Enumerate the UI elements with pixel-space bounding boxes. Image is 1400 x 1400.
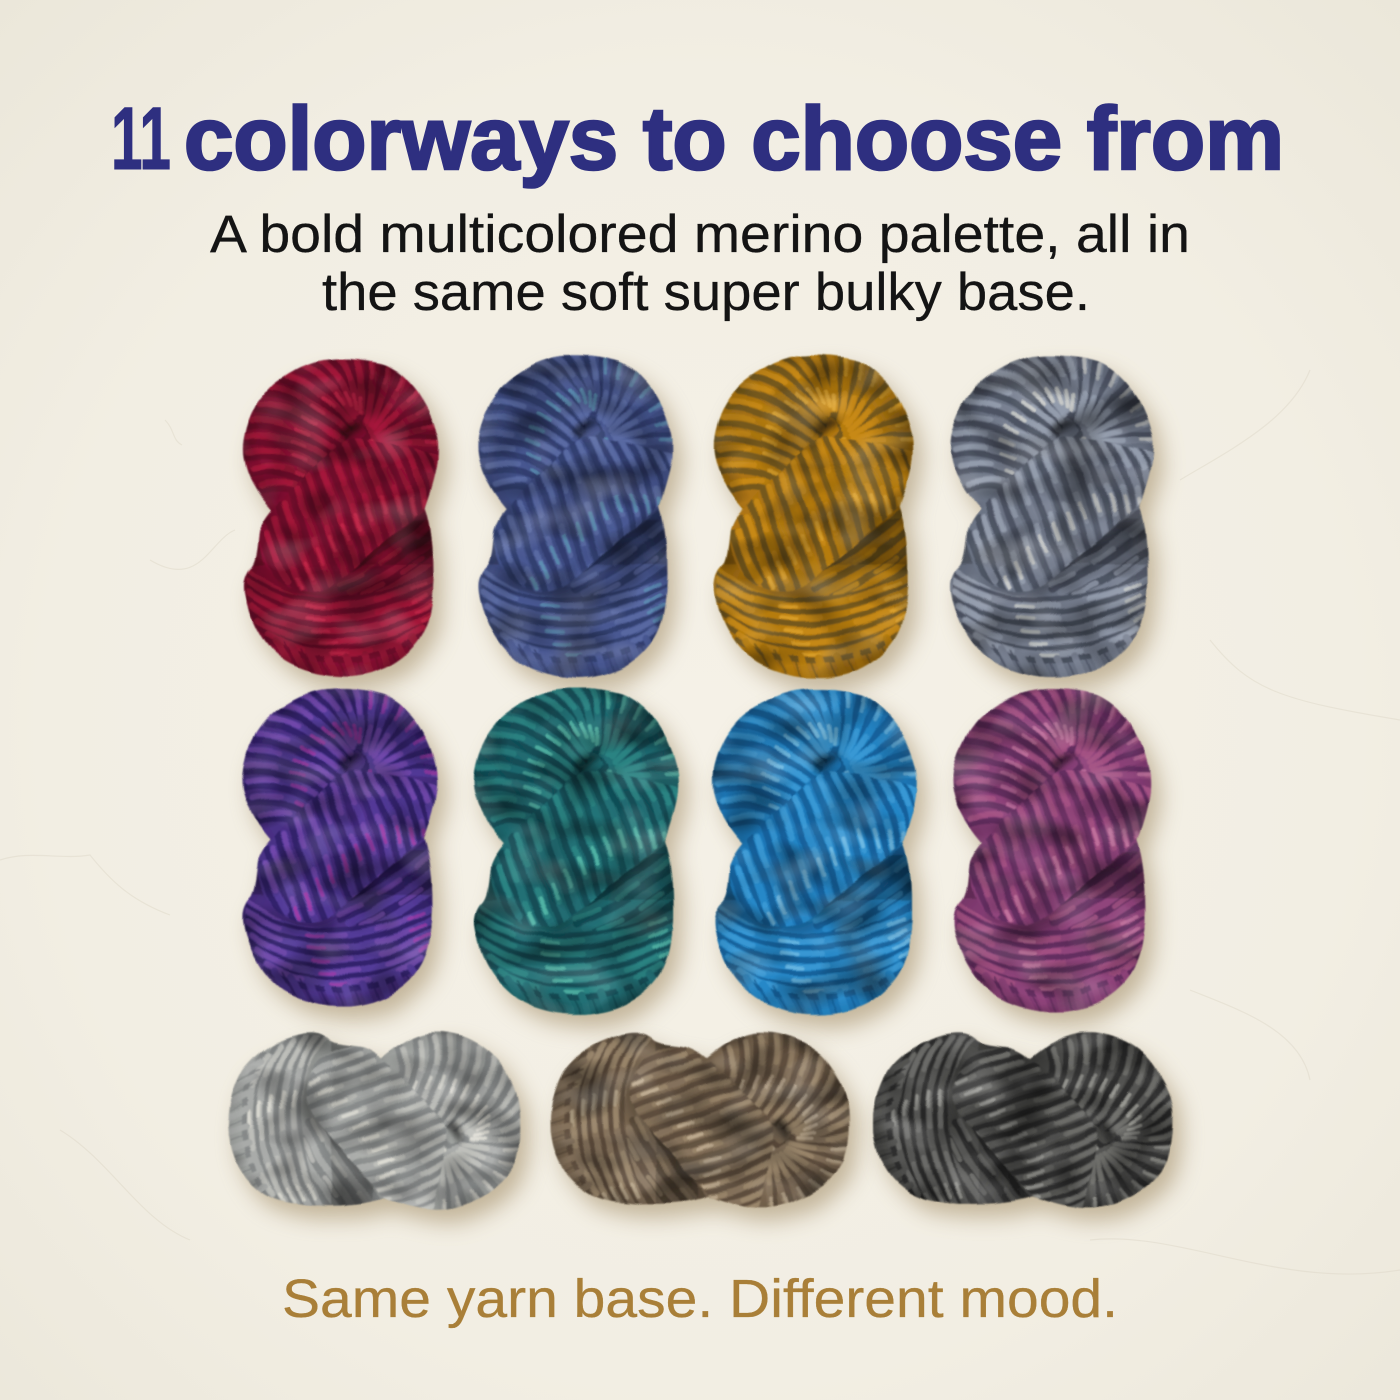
title: colorways to choose from bbox=[184, 88, 1284, 188]
skein: deep teal bbox=[466, 679, 691, 1023]
footer tagline: Same yarn base. Different mood. bbox=[282, 1269, 1118, 1329]
skein: crimson red bbox=[235, 350, 450, 685]
skein: charcoal bbox=[865, 1025, 1181, 1219]
title: 11 bbox=[111, 88, 171, 188]
skein: violet purple bbox=[234, 680, 449, 1015]
subtitle bbox=[210, 205, 1190, 322]
skein: bright sky blue bbox=[705, 680, 930, 1023]
skein: steel grey bbox=[942, 346, 1165, 686]
subtitle: the same soft super bulky base. bbox=[322, 263, 1090, 322]
skein: golden amber bbox=[706, 346, 925, 686]
skein: taupe brown bbox=[542, 1025, 857, 1219]
skein: orchid magenta bbox=[945, 680, 1162, 1020]
skein: denim blue bbox=[470, 346, 684, 686]
skein: light heather grey bbox=[221, 1025, 529, 1221]
subtitle: A bold multicolored merino palette, all in bbox=[210, 205, 1190, 264]
